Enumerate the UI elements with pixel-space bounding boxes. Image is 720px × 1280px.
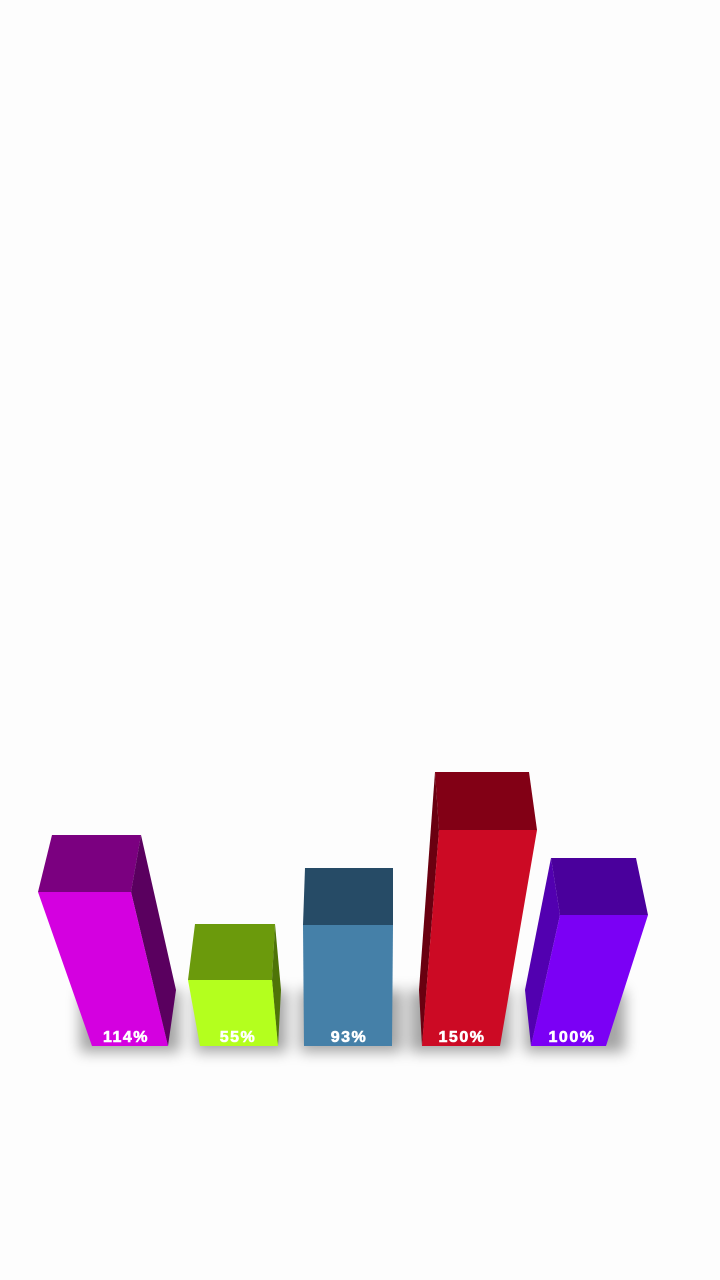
shadows: [80, 990, 625, 1052]
bar: 150%: [419, 772, 537, 1046]
bar: 100%: 100%: [549, 1029, 595, 1046]
bar: 114%: 114%: [103, 1029, 149, 1046]
bar: 93%: 93%: [331, 1029, 367, 1046]
bar: 93%: [303, 868, 393, 1046]
bar: 100%: [525, 858, 648, 1046]
bar: 150%: 150%: [439, 1029, 485, 1046]
bar: 114%: [38, 835, 176, 1046]
bar: 55%: [188, 924, 281, 1046]
bar: 55%: 55%: [220, 1029, 256, 1046]
